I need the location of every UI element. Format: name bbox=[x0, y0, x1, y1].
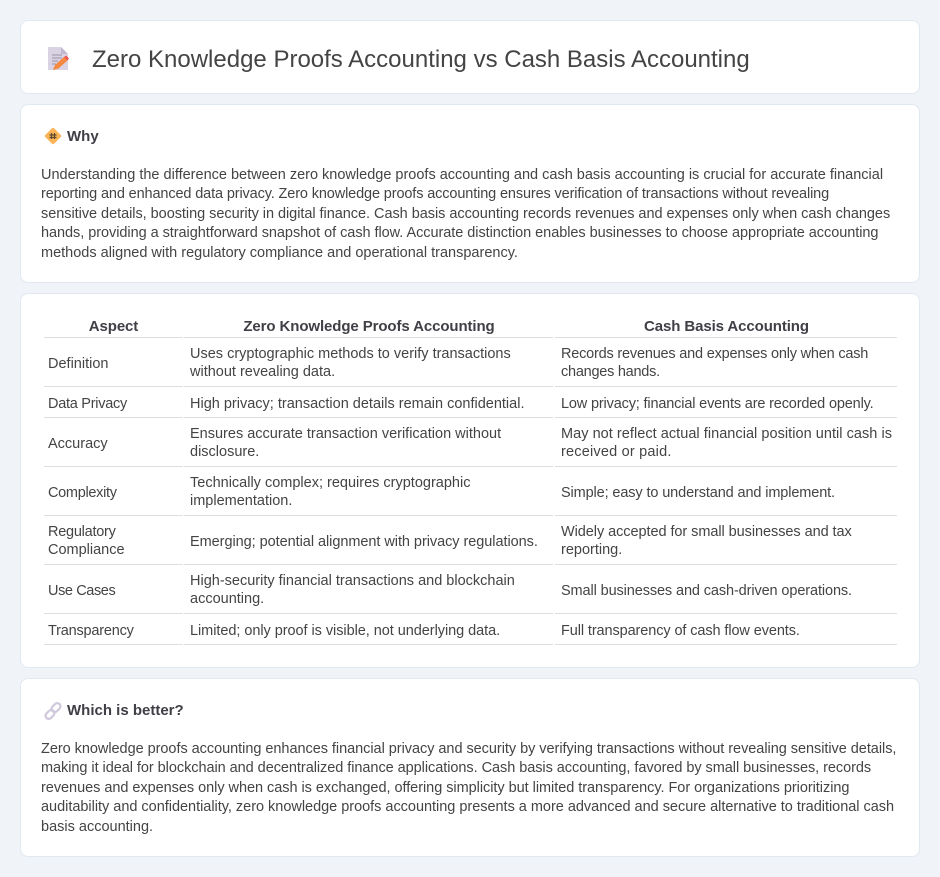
heading: why: Why bbox=[67, 128, 99, 145]
table: Full transparency of cash flow events. bbox=[561, 623, 800, 639]
table: reporting. bbox=[561, 542, 622, 558]
table: accounting. bbox=[190, 591, 264, 607]
table bbox=[44, 318, 897, 645]
table: Widely accepted for small businesses and tax bbox=[561, 524, 852, 540]
table: disclosure. bbox=[190, 444, 259, 460]
row: regulatory compliance bbox=[48, 524, 125, 558]
title: Zero Knowledge Proofs Accounting vs Cash Basis Accounting bbox=[92, 46, 750, 73]
row: use cases: Use Cases bbox=[48, 583, 115, 599]
text block: which is better: revenues and expenses only when cash is exchanged, offering simplicity but limited transparency. For organizations prioritizing bbox=[41, 780, 849, 796]
text block: why: sensitive details, boosting security in digital finance. Cash basis accounting records revenues and expenses only when cash changes bbox=[41, 206, 890, 222]
row: definition: Definition bbox=[48, 356, 108, 372]
column header: zero knowledge proofs accounting: Zero Knowledge Proofs Accounting bbox=[243, 318, 495, 335]
table: Ensures accurate transaction verification without bbox=[190, 426, 501, 442]
row: accuracy: Accuracy bbox=[48, 436, 108, 452]
panel: why bbox=[20, 104, 920, 283]
table: High-security financial transactions and blockchain bbox=[190, 573, 515, 589]
row: transparency: Transparency bbox=[48, 623, 134, 639]
table: Low privacy; financial events are recorded openly. bbox=[561, 396, 874, 412]
text block: why: methods aligned with regulatory compliance and operational transparency. bbox=[41, 245, 518, 261]
table: Simple; easy to understand and implement. bbox=[561, 485, 835, 501]
row: regulatory compliance: Compliance bbox=[48, 542, 125, 558]
table: changes hands. bbox=[561, 364, 660, 380]
table: High privacy; transaction details remain confidential. bbox=[190, 396, 524, 412]
panel: comparison table bbox=[20, 293, 920, 668]
table: Records revenues and expenses only when cash bbox=[561, 346, 868, 362]
text block: which is better: Zero knowledge proofs accounting enhances financial privacy and security by verifying transactions without revealing sensitive details, bbox=[41, 741, 896, 757]
table: implementation. bbox=[190, 493, 292, 509]
text block: which is better: making it ideal for blockchain and decentralized finance applications. Cash basis accounting, favored by small businesses, records bbox=[41, 760, 871, 776]
icon: link bbox=[44, 702, 62, 720]
table: May not reflect actual financial position until cash is bbox=[561, 426, 892, 442]
row: regulatory compliance: Regulatory bbox=[48, 524, 116, 540]
table: without revealing data. bbox=[190, 364, 335, 380]
text block: why: Understanding the difference between zero knowledge proofs accounting and cash basis accounting is crucial for accurate financial bbox=[41, 167, 883, 183]
text block: which is better: basis accounting. bbox=[41, 819, 153, 835]
text block: why: reporting and enhanced data privacy. Zero knowledge proofs accounting ensures verification of transactions without revealing bbox=[41, 186, 829, 202]
column header: aspect: Aspect bbox=[89, 318, 138, 335]
table: received or paid. bbox=[561, 444, 672, 460]
text block: why: hands, providing a straightforward snapshot of cash flow. Accurate distinction enables businesses to choose appropriate accounting bbox=[41, 225, 878, 241]
icon: document with pencil bbox=[48, 47, 69, 70]
table: Technically complex; requires cryptographic bbox=[190, 475, 470, 491]
table: Small businesses and cash-driven operations. bbox=[561, 583, 852, 599]
row: complexity: Complexity bbox=[48, 485, 117, 501]
heading: which is better: Which is better? bbox=[67, 702, 184, 719]
panel: title card bbox=[20, 20, 920, 94]
row: data privacy: Data Privacy bbox=[48, 396, 127, 412]
table: Limited; only proof is visible, not underlying data. bbox=[190, 623, 500, 639]
panel: which is better bbox=[20, 678, 920, 857]
text block: why bbox=[41, 167, 890, 261]
icon: warning diamond bbox=[44, 128, 62, 144]
column header: cash basis accounting: Cash Basis Accounting bbox=[644, 318, 809, 335]
table: Uses cryptographic methods to verify transactions bbox=[190, 346, 511, 362]
text block: which is better: auditability and confidentiality, zero knowledge proofs accounting presents a more advanced and secure alternative to traditional cash bbox=[41, 799, 894, 815]
text block: which is better bbox=[41, 741, 896, 835]
table: Emerging; potential alignment with privacy regulations. bbox=[190, 534, 538, 550]
